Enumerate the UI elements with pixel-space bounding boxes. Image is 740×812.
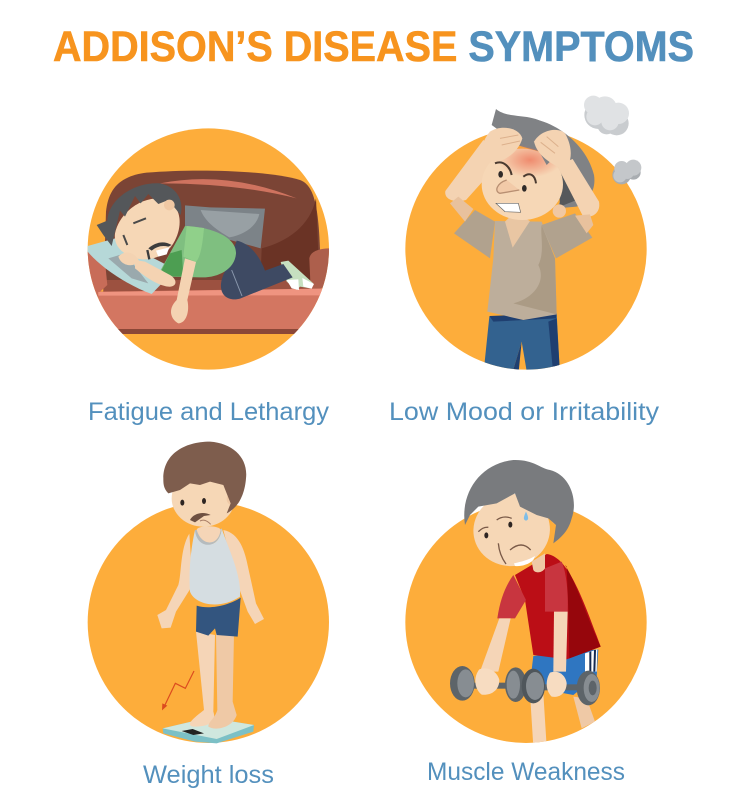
orange circle [88,502,329,743]
panel: low mood or irritability [389,96,660,426]
face features [484,532,488,538]
steam clouds [584,96,641,184]
red down arrow [163,671,194,708]
sofa [87,171,332,334]
green shirt [161,226,236,277]
orange circle [405,502,647,743]
ear [553,204,566,218]
grey cushion [185,205,265,248]
arms [157,534,193,628]
title: ADDISON’S DISEASE SYMPTOMS [53,23,694,71]
blue pillow [88,238,170,294]
red shirt [515,554,601,659]
shirt [487,221,557,320]
socks [281,261,313,290]
face features [180,500,184,506]
right dumbbell [522,669,600,705]
neck [532,553,545,572]
front hair [492,109,563,165]
ear [164,200,175,210]
pillow arm [135,260,175,287]
legs and feet [190,632,215,727]
neck [197,526,221,542]
forehead redness [498,143,562,177]
orange circle [88,128,329,370]
head [115,199,180,259]
arms [480,618,511,672]
shorts [530,649,598,695]
right arm [557,159,599,217]
illustration: thin man on scale [88,442,329,743]
tank top [190,528,240,605]
face features [495,162,536,183]
label: Muscle Weakness [427,758,625,786]
jeans [483,313,560,375]
head [468,488,556,572]
hand under cheek [118,252,139,265]
hair [464,460,574,543]
hanging arm [171,258,196,323]
illustration: frustrated man holding head [405,96,647,375]
label: Weight loss [143,761,274,789]
back hair [493,118,594,208]
hands [475,668,499,695]
label: Fatigue and Lethargy [88,398,330,426]
legs [530,694,595,742]
illustration: tired man with dumbbells [405,460,647,747]
illustration: man sleeping on sofa [87,128,332,370]
label: Low Mood or Irritability [389,398,660,426]
sweat drop [524,512,528,521]
ear [227,492,240,506]
ear [550,509,566,525]
panel: weight loss [88,442,329,789]
panel: fatigue and lethargy [87,128,332,426]
arms [445,140,505,201]
head [482,149,563,220]
shorts [196,598,241,637]
left dumbbell [450,666,526,702]
panel: muscle weakness [405,460,647,786]
orange circle [405,128,647,370]
hands [483,128,522,162]
face features [123,218,146,245]
jeans [221,241,293,299]
head [172,470,235,527]
bathroom scale [163,718,254,743]
hair [97,183,181,246]
hair [163,442,246,513]
